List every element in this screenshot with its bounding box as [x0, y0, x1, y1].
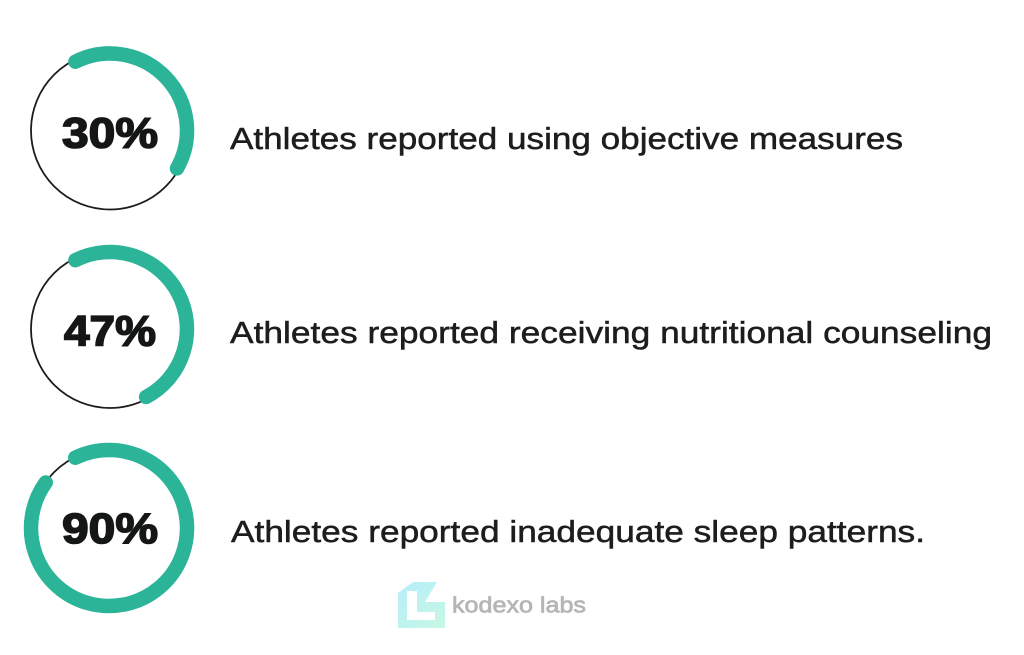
value: 47%: 47% [64, 308, 156, 356]
value: 90%: 90% [62, 505, 158, 553]
ring progress: 47% [75, 252, 187, 397]
logo wordmark: kodexo labs [452, 592, 586, 618]
stat row: 90% inadequate sleep [31, 449, 925, 607]
label: inadequate sleep: Athletes reported inadequate sleep patterns. [231, 514, 925, 549]
logo mark [398, 582, 445, 628]
value: 30%: 30% [62, 110, 158, 158]
label: nutritional counseling: Athletes reported receiving nutritional counseling [230, 315, 992, 350]
ring progress: 30% [75, 54, 187, 168]
ring progress: 90% [31, 450, 187, 606]
logo: Kodexo Labs [398, 582, 586, 628]
ring track: 90% [31, 449, 189, 607]
stat row: 30% objective measures [31, 52, 903, 210]
ring track: 30% [31, 52, 189, 210]
stat row: 47% nutritional counseling [31, 250, 992, 408]
ring track: 47% [31, 250, 189, 408]
label: objective measures: Athletes reported using objective measures [230, 121, 903, 156]
